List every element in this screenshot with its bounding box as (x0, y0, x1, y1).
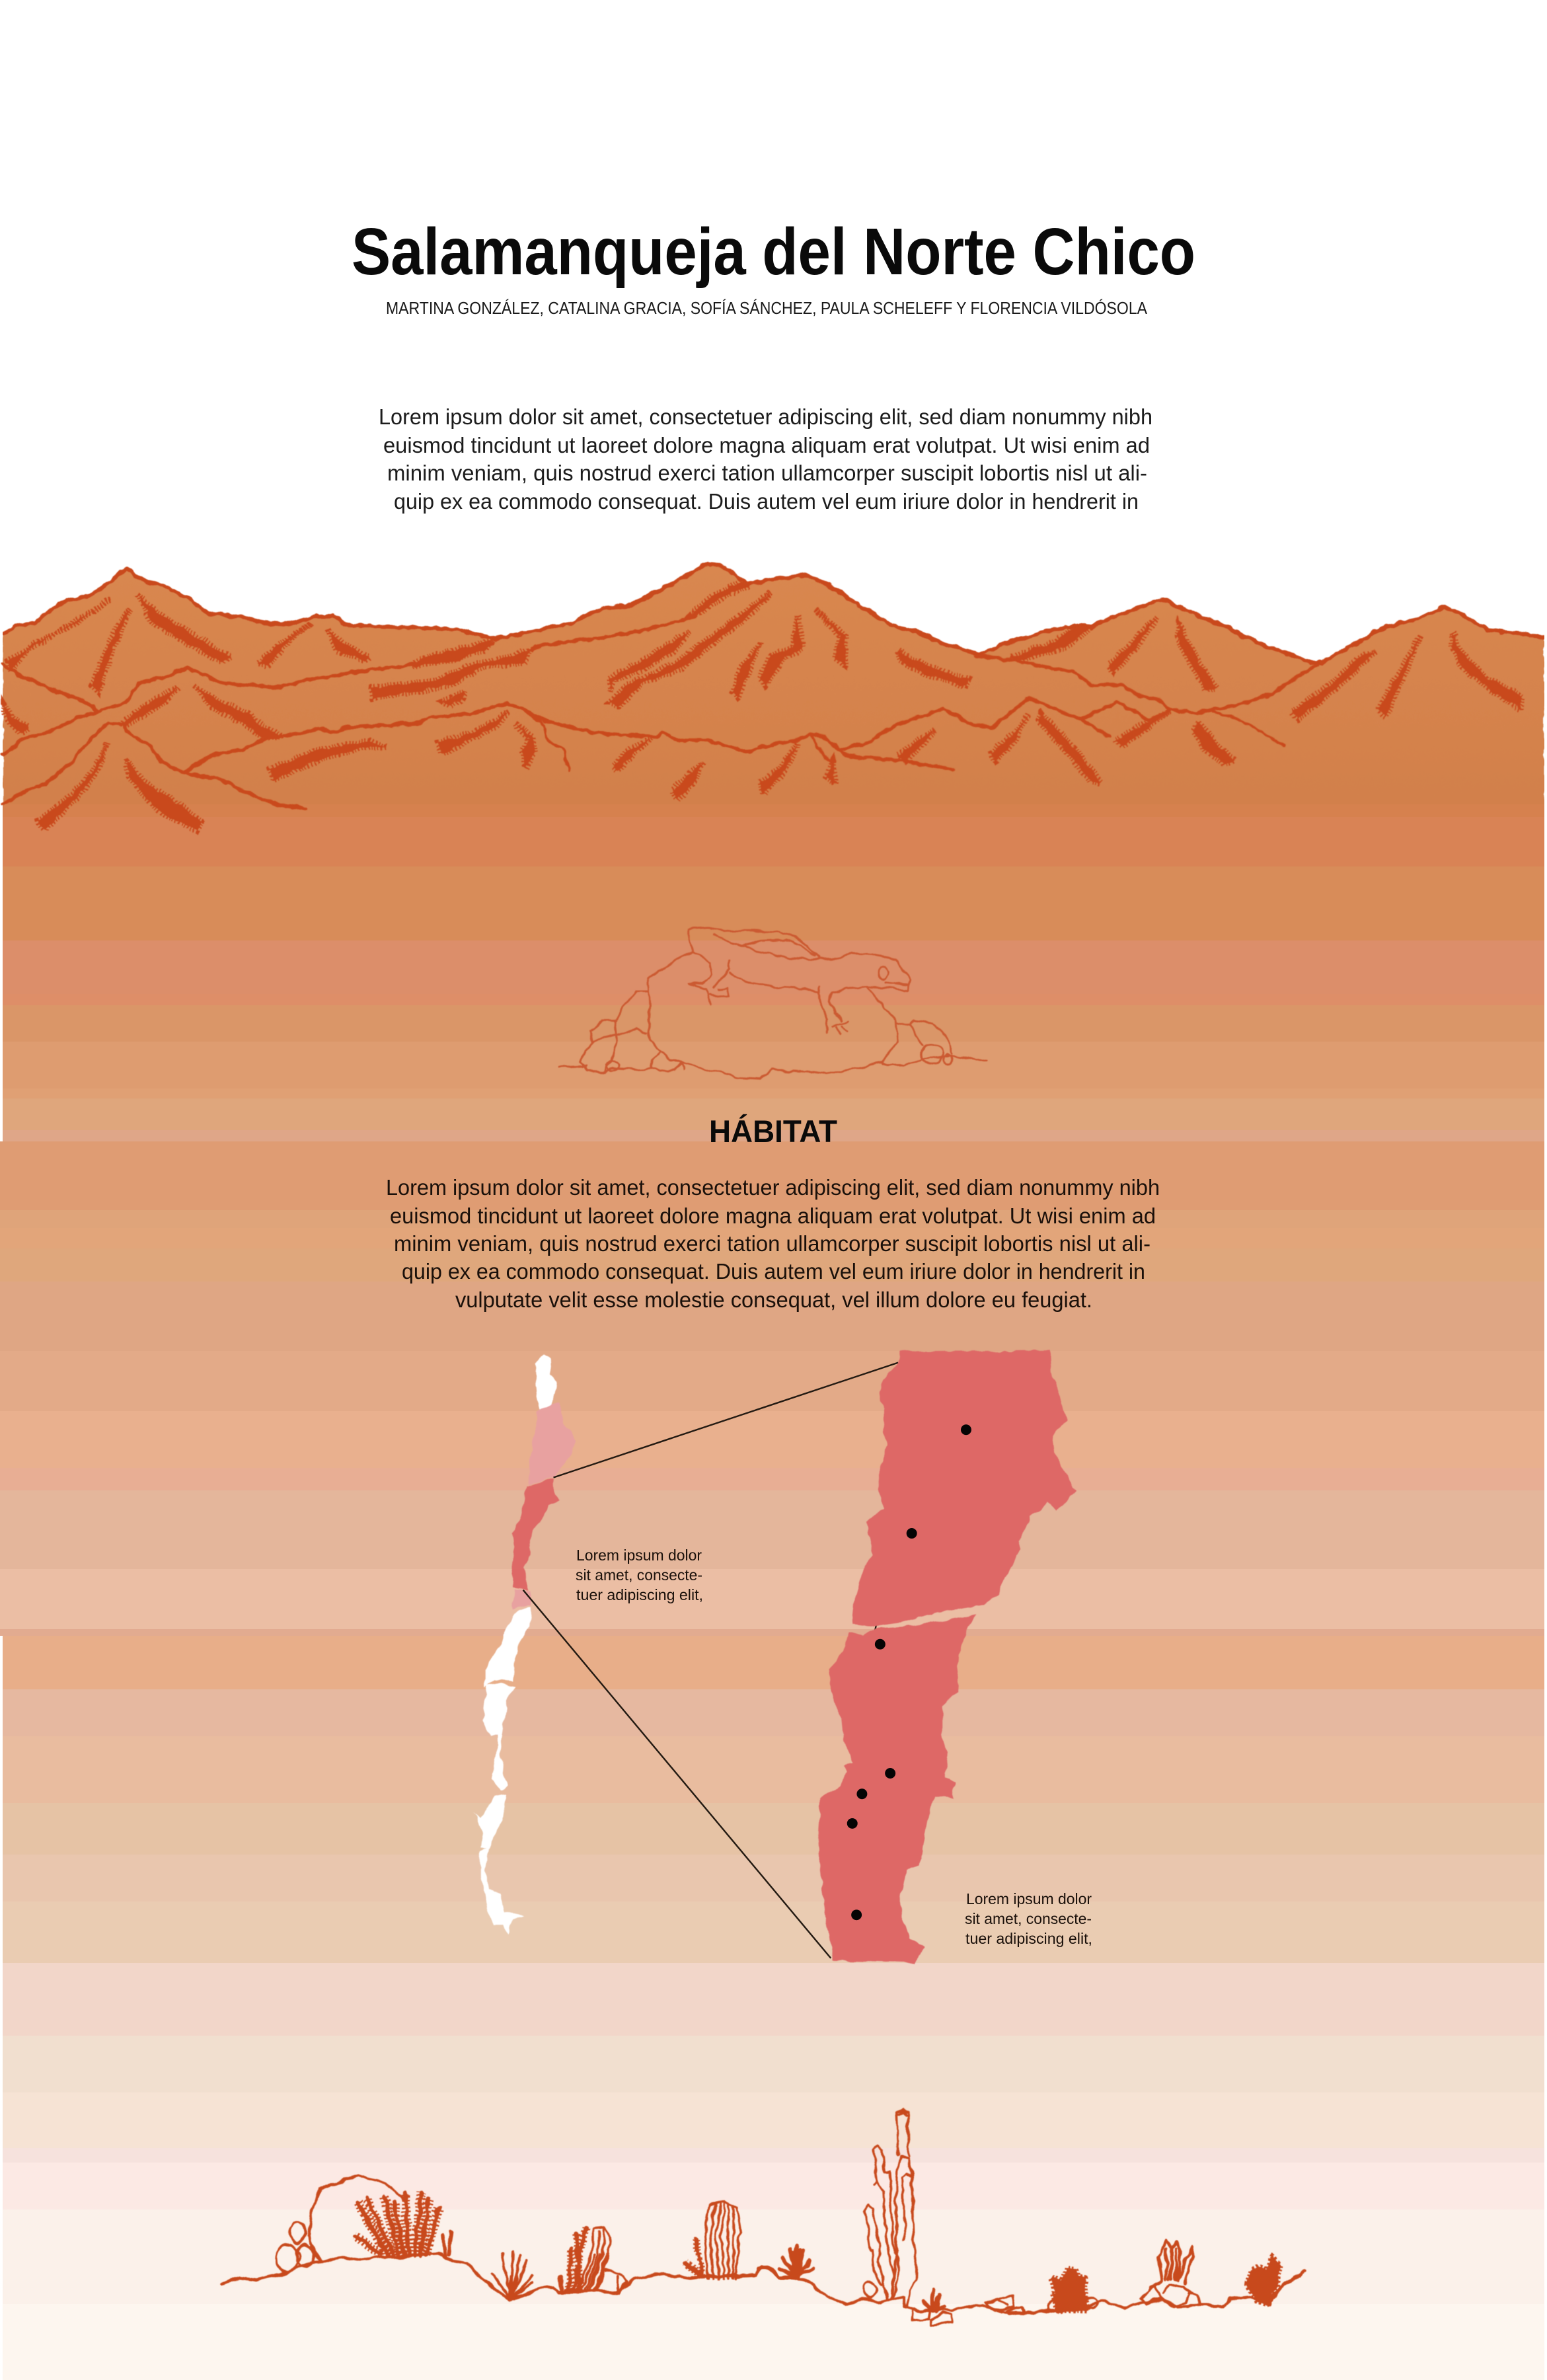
map caption: Chile: sit amet, consecte- (576, 1566, 702, 1584)
dense bush (1048, 2267, 1098, 2312)
illustration: desert ground with plants, left part (221, 2176, 793, 2300)
barrel cactus (686, 2202, 741, 2278)
shrub (354, 2192, 451, 2256)
intro text block: quip ex ea commodo consequat. Duis autem vel eum iriure dolor in hendrerit in (394, 489, 1139, 514)
intro text block: minim veniam, quis nostrud exerci tation ullamcorper suscipit lobortis nisl ut ali- (387, 461, 1147, 485)
agave (492, 2252, 532, 2299)
tall columnar cactus (863, 2110, 916, 2307)
zoom connector lines (523, 1363, 898, 1958)
map caption: Chile: Lorem ipsum dolor (576, 1547, 702, 1564)
background colour bands (0, 804, 1544, 2380)
rocks (558, 952, 987, 1079)
map caption: Chile: tuer adipiscing elit, (576, 1586, 703, 1603)
authors: MARTINA GONZÁLEZ, CATALINA GRACIA, SOFÍA SÁNCHEZ, PAULA SCHELEFF Y FLORENCIA VILDÓSOLA (386, 298, 1148, 318)
map caption: detail (965, 1890, 1092, 1947)
left ridge lines and hatching (3, 582, 773, 831)
habitat text block: euismod tincidunt ut laoreet dolore magna aliquam erat volutpat. Ut wisi enim ad (390, 1204, 1156, 1228)
habitat text block: Lorem ipsum dolor sit amet, consectetuer adipiscing elit, sed diam nonummy nibh (386, 1175, 1160, 1200)
stones (986, 2295, 1024, 2315)
map caption: detail: sit amet, consecte- (965, 1910, 1092, 1927)
intro text block: Lorem ipsum dolor sit amet, consectetuer adipiscing elit, sed diam nonummy nibh (379, 404, 1152, 429)
habitat text block (386, 1175, 1160, 1312)
bush at right (1248, 2257, 1279, 2303)
boulder (276, 2176, 405, 2272)
gecko (688, 927, 911, 1034)
map of Chile (472, 1354, 576, 1934)
intro text block: euismod tincidunt ut laoreet dolore magna aliquam erat volutpat. Ut wisi enim ad (383, 433, 1150, 457)
map caption: detail: Lorem ipsum dolor (966, 1890, 1092, 1907)
illustration: gecko on rocks (558, 927, 987, 1079)
heading: habitat: HÁBITAT (709, 1114, 837, 1149)
title: Salamanqueja del Norte Chico (352, 215, 1195, 289)
habitat text block: vulputate velit esse molestie consequat, vel illum dolore eu feugiat. (455, 1287, 1092, 1312)
detail map of region (818, 1350, 1075, 1962)
map caption: Chile (576, 1547, 703, 1603)
ground line (221, 2254, 793, 2300)
habitat text block: minim veniam, quis nostrud exerci tation ullamcorper suscipit lobortis nisl ut ali- (394, 1231, 1151, 1256)
intro text block (379, 404, 1152, 514)
fronded cactus on rocks (1141, 2241, 1200, 2307)
location dots (847, 1424, 971, 1920)
habitat text block: quip ex ea commodo consequat. Duis autem vel eum iriure dolor in hendrerit in (402, 1259, 1145, 1284)
small agave (779, 2245, 812, 2276)
small plant with stones (913, 2290, 952, 2325)
mountain silhouette (3, 564, 1544, 814)
map caption: detail: tuer adipiscing elit, (965, 1930, 1092, 1947)
illustration: mountain ridges (3, 582, 1523, 831)
ribbed cactus with shrub (560, 2227, 627, 2292)
illustration: desert ground with plants, right part (760, 2110, 1306, 2325)
ground line (760, 2268, 1306, 2313)
right ridge lines and hatching (760, 609, 1523, 794)
